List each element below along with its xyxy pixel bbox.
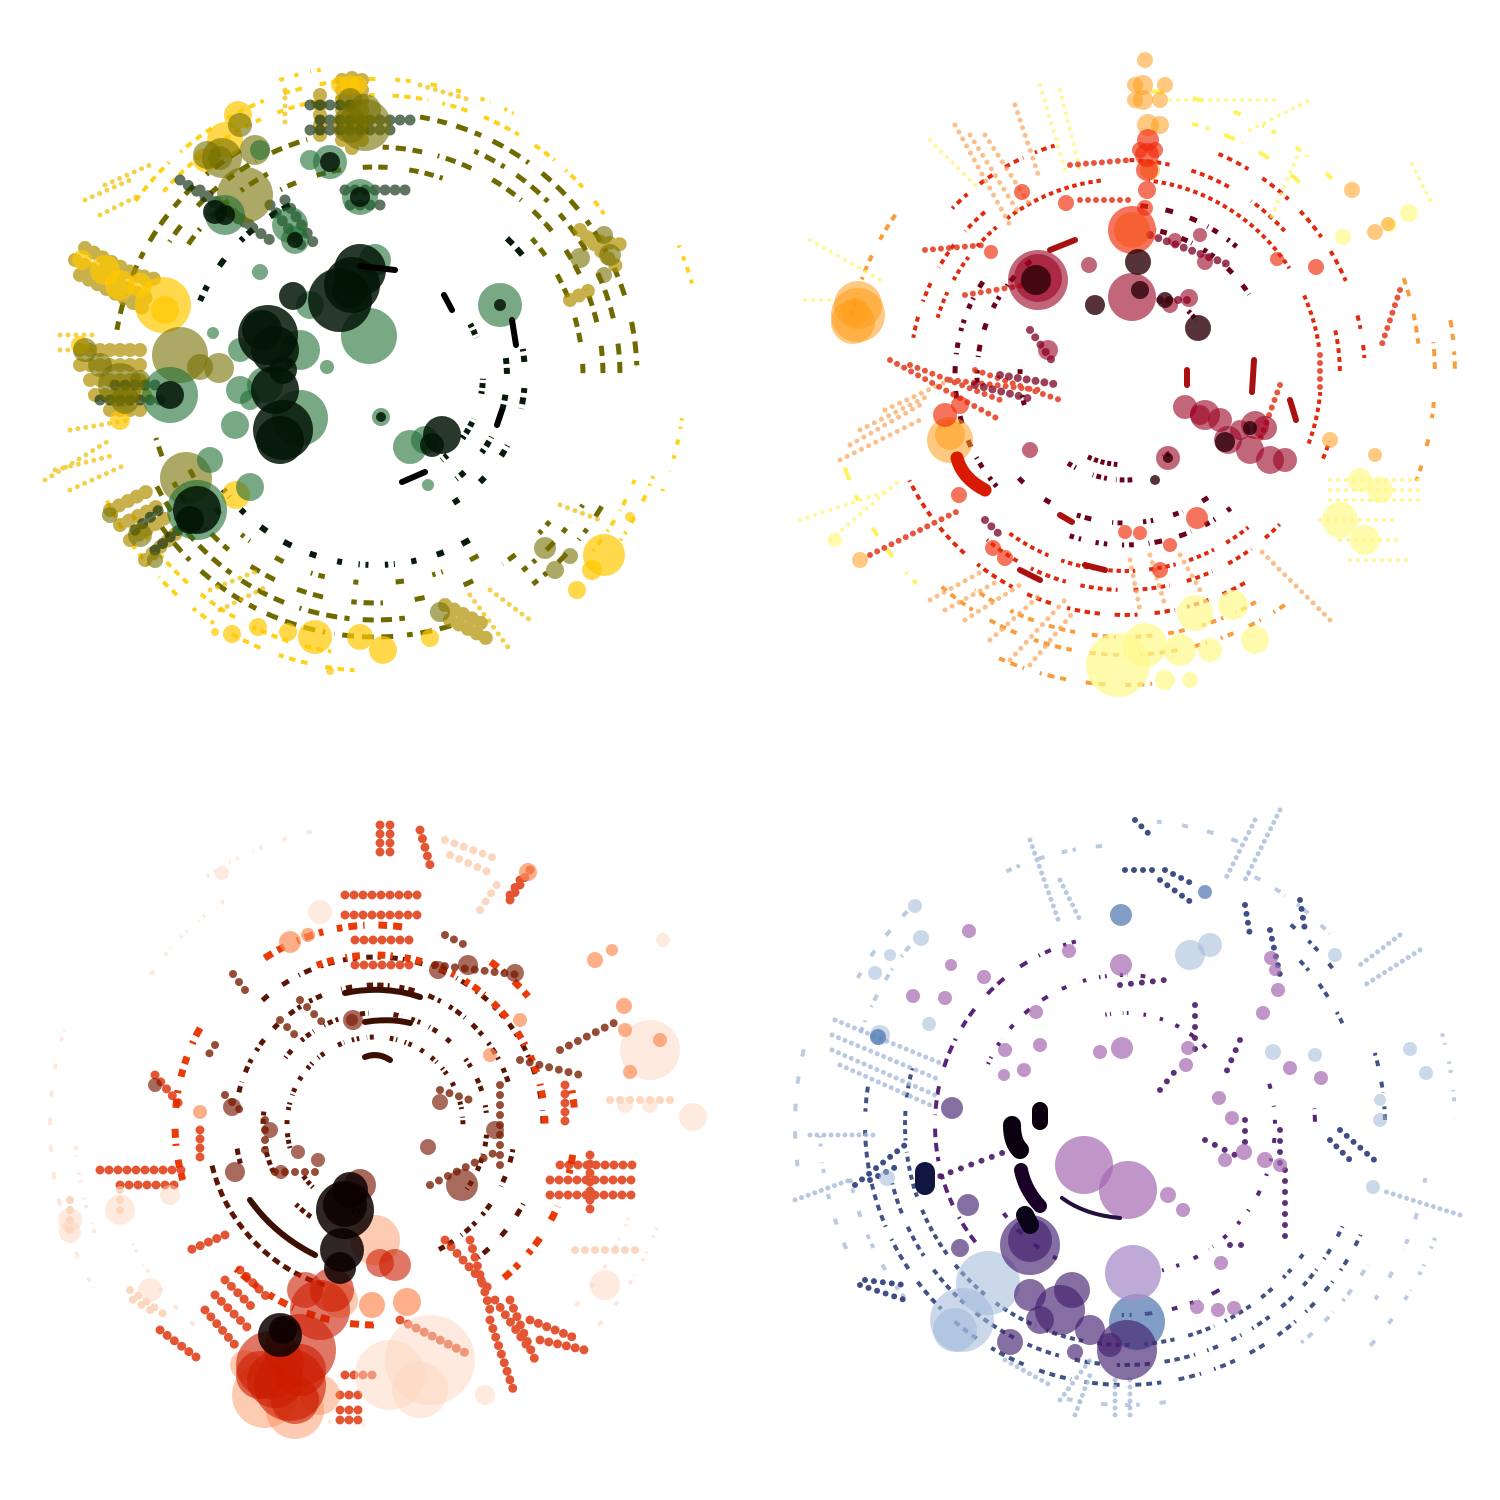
dotted spokes: dark green: [100, 105, 420, 550]
dotted spokes: peach: [70, 840, 680, 1315]
rings: dark red inner arcs: [952, 203, 1252, 548]
bubbles: green: [142, 140, 522, 540]
dotted spokes: purple: [930, 980, 1285, 1245]
bubbles: crimson: [1008, 228, 1297, 474]
dotted spokes: navy: [855, 820, 1380, 1300]
bubbles: yellow: [71, 75, 635, 675]
bubbles: pale purple: [1105, 1245, 1161, 1301]
bubbles: dark core: [1021, 249, 1257, 485]
bubbles: deep red halo: [230, 1215, 400, 1439]
bubbles: pale peach: [58, 866, 707, 1418]
dotted spokes: orange and peach: [840, 105, 1330, 665]
thick dark strokes: [360, 266, 516, 482]
dotted spokes: pale blue: [795, 810, 1460, 1415]
bubbles: orange: [193, 863, 667, 1318]
rings: pale blue arcs: [793, 819, 1457, 1407]
rings: pale peach arcs: [48, 830, 659, 1427]
rings: purple arcs: [935, 935, 1315, 1315]
rings: outer yellow arcs: [105, 68, 694, 672]
bubbles: deep red cluster: [236, 1249, 411, 1424]
bubbles: pale yellow: [828, 204, 1418, 697]
chart: blue and purple radial bubbles: [795, 795, 1460, 1455]
dotted spokes: red-orange: [100, 825, 640, 1420]
dotted spokes: yellow: [45, 85, 600, 650]
bubbles: olive: [73, 88, 621, 622]
bubbles: dark green core: [156, 152, 506, 534]
bubbles: steel blue: [870, 885, 1212, 1350]
rings: dark inner arcs: [197, 202, 528, 568]
dotted spokes: pale yellow: [800, 85, 1430, 560]
bubbles: black core: [258, 1172, 374, 1357]
rings: olive arcs: [113, 113, 637, 637]
dotted spokes: red: [870, 160, 1400, 555]
bubbles: orange: [831, 52, 1395, 568]
rings: orange arcs: [854, 214, 1457, 687]
dotted spokes: brown: [205, 935, 620, 1185]
bubbles: deep purple cluster: [941, 1097, 1157, 1380]
rings: brown inner arcs: [207, 957, 543, 1293]
chart: green and yellow radial bubbles: [45, 45, 705, 705]
bubbles: red and orange-red: [933, 129, 1324, 578]
thick black arcs: [1012, 1125, 1020, 1150]
rings: navy arcs: [863, 923, 1387, 1387]
bubbles: pale blue: [868, 899, 1433, 1352]
chart: yellow orange and red radial bubbles: [795, 45, 1455, 705]
dotted spokes: maroon: [975, 235, 1230, 535]
dotted spokes: olive: [75, 78, 625, 640]
rings: pale yellow arcs: [843, 89, 1334, 586]
thick red strokes: [957, 458, 985, 490]
rings: red arcs: [885, 135, 1365, 615]
bubbles: brown: [148, 955, 524, 1201]
arc: dark ring near top: [250, 990, 420, 1255]
chart: peach red and brown radial bubbles: [50, 800, 707, 1450]
rings: red mid arcs: [175, 925, 575, 1325]
bubbles: light purple: [906, 924, 1328, 1317]
